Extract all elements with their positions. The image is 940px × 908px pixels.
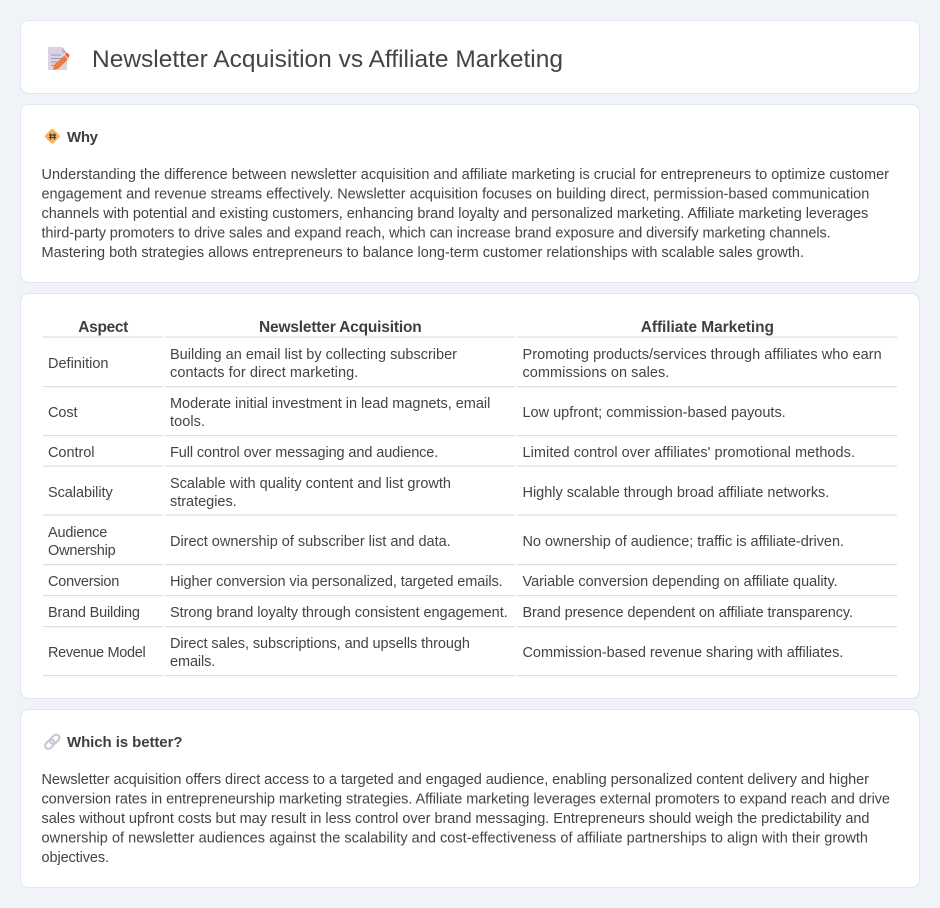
panel: why bbox=[20, 104, 920, 282]
row: conversion: Conversion bbox=[48, 574, 119, 590]
row: control: Control bbox=[48, 445, 94, 461]
icon: chain link bbox=[44, 733, 61, 750]
text block: why: Mastering both strategies allows entrepreneurs to balance long-term customer relationships with scalable sales growth. bbox=[42, 245, 804, 261]
text block: why: third-party promoters to drive sales and expand reach, which can increase brand exposure and diversify marketing channels. bbox=[42, 226, 831, 242]
row: control: Limited control over affiliates' promotional methods. bbox=[522, 445, 855, 461]
row: audience ownership bbox=[48, 525, 844, 559]
row: definition: Promoting products/services through affiliates who earn bbox=[522, 347, 882, 363]
icon: warning diamond bbox=[44, 128, 60, 144]
row: definition: contacts for direct marketing. bbox=[170, 365, 358, 381]
text block: which is better: ownership of newsletter audiences against the scalability and cost-effectiveness of affiliate partnerships to align with their growth bbox=[42, 831, 868, 847]
table header row: Newsletter Acquisition bbox=[259, 319, 422, 336]
heading: why: Why bbox=[67, 129, 99, 146]
row: conversion: Variable conversion depending on affiliate quality. bbox=[522, 574, 838, 590]
row: scalability: Scalable with quality content and list growth bbox=[170, 476, 451, 492]
text block: which is better: sales without upfront costs but may result in less control over brand messaging. Entrepreneurs should weigh the predictability and bbox=[42, 811, 870, 827]
row: definition bbox=[48, 347, 882, 381]
row: cost: Moderate initial investment in lead magnets, email bbox=[170, 396, 490, 412]
row: revenue model: Commission-based revenue sharing with affiliates. bbox=[522, 645, 843, 661]
row: scalability: Scalability bbox=[48, 485, 113, 501]
row: audience ownership: No ownership of audience; traffic is affiliate-driven. bbox=[522, 534, 844, 550]
row: definition: commissions on sales. bbox=[522, 365, 669, 381]
row: definition: Building an email list by collecting subscriber bbox=[170, 347, 457, 363]
row: brand building: Strong brand loyalty through consistent engagement. bbox=[170, 605, 508, 621]
row: brand building bbox=[48, 605, 853, 621]
row: conversion bbox=[48, 574, 838, 590]
row: control: Full control over messaging and audience. bbox=[170, 445, 438, 461]
row: scalability bbox=[48, 476, 829, 510]
table header row: Affiliate Marketing bbox=[641, 319, 774, 336]
row: revenue model bbox=[48, 636, 843, 670]
row: cost: Cost bbox=[48, 405, 78, 421]
header panel bbox=[20, 20, 920, 94]
text block: which is better: conversion rates in entrepreneurship marketing strategies. Affiliate marketing leverages external promoters to expand reach and drive bbox=[42, 792, 890, 808]
row: revenue model: emails. bbox=[170, 654, 215, 670]
text block: why: Understanding the difference between newsletter acquisition and affiliate marketing is crucial for entrepreneurs to optimize customer bbox=[42, 167, 889, 183]
row: scalability: Highly scalable through broad affiliate networks. bbox=[522, 485, 829, 501]
text block: which is better bbox=[42, 772, 890, 866]
table row lines bbox=[43, 336, 897, 676]
row: revenue model: Revenue Model bbox=[48, 645, 146, 661]
heading: which is better: Which is better? bbox=[67, 734, 182, 751]
text block: which is better: Newsletter acquisition offers direct access to a targeted and engaged audience, enabling personalized content delivery and higher bbox=[42, 772, 869, 788]
row: scalability: strategies. bbox=[170, 494, 237, 510]
text block: why: channels with potential and existing customers, enhancing brand loyalty and personalized marketing. Affiliate marketing leverages bbox=[42, 206, 868, 222]
row: revenue model: Direct sales, subscriptions, and upsells through bbox=[170, 636, 470, 652]
row: definition: Definition bbox=[48, 356, 108, 372]
text block: why: engagement and revenue streams effectively. Newsletter acquisition focuses on building direct, permission-based communication bbox=[42, 186, 869, 202]
text block: which is better: objectives. bbox=[42, 850, 109, 866]
panel: which is better bbox=[20, 710, 920, 888]
row: brand building: Brand presence dependent on affiliate transparency. bbox=[522, 605, 853, 621]
row: cost: Low upfront; commission-based payouts. bbox=[522, 405, 786, 421]
text block: why bbox=[42, 167, 889, 261]
row: cost bbox=[48, 396, 786, 430]
row: control bbox=[48, 445, 855, 461]
title: Newsletter Acquisition vs Affiliate Marketing bbox=[92, 46, 563, 73]
table header row: Aspect bbox=[78, 319, 128, 336]
icon: document with pencil bbox=[48, 47, 70, 70]
row: brand building: Brand Building bbox=[48, 605, 140, 621]
row: audience ownership: Audience bbox=[48, 525, 107, 541]
table header row bbox=[78, 319, 774, 336]
row: conversion: Higher conversion via personalized, targeted emails. bbox=[170, 574, 503, 590]
row: audience ownership: Ownership bbox=[48, 543, 116, 559]
row: cost: tools. bbox=[170, 414, 205, 430]
panel: comparison table bbox=[20, 294, 920, 698]
row: audience ownership: Direct ownership of subscriber list and data. bbox=[170, 534, 451, 550]
